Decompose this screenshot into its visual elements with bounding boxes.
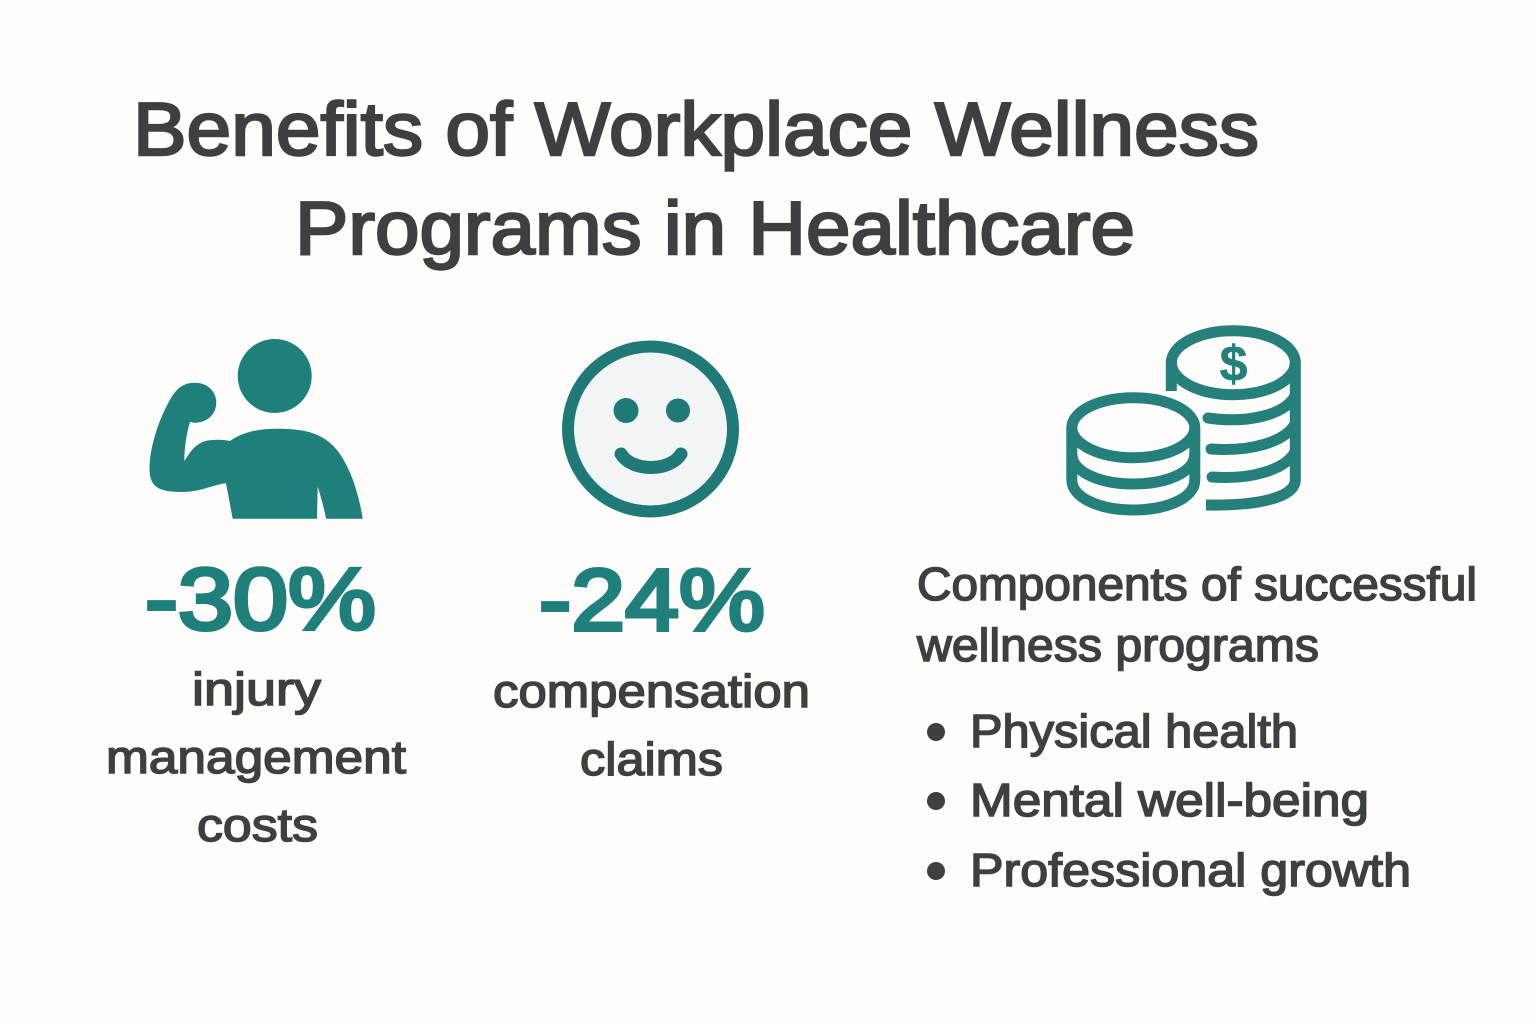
title: Programs in Healthcare: [295, 186, 1135, 270]
label: compensation claims: [493, 665, 810, 785]
title: [133, 87, 1259, 270]
bullet list: Mental well-being: [970, 774, 1369, 826]
bullet list: [927, 705, 1411, 896]
label: injury management costs: management: [106, 731, 406, 783]
heading: components of successful wellness programs: Components of successful: [917, 558, 1477, 610]
title: Benefits of Workplace Wellness: [133, 87, 1259, 171]
icon: flexing person: [149, 339, 363, 519]
heading: components of successful wellness programs: wellness programs: [916, 619, 1319, 671]
icon: coin stacks with dollar sign: $: [1220, 336, 1248, 392]
label: injury management costs: [106, 663, 406, 851]
bullet list: Physical health: [970, 705, 1298, 757]
label: compensation claims: claims: [580, 733, 723, 785]
bullet list: Professional growth: [970, 844, 1411, 896]
panel: components of successful wellness programs: [916, 331, 1477, 896]
label: compensation claims: compensation: [493, 665, 810, 717]
heading: components of successful wellness programs: [916, 558, 1477, 671]
label: injury management costs: costs: [197, 799, 318, 851]
panel: injury management costs: [106, 339, 406, 851]
label: injury management costs: injury: [192, 663, 321, 715]
stat: -24%: -24%: [539, 552, 765, 649]
icon: smiley face: [568, 346, 733, 512]
icon: coin stacks with dollar sign: [1072, 331, 1295, 510]
stat: -30%: -30%: [145, 551, 376, 648]
panel: compensation claims: [493, 346, 810, 785]
